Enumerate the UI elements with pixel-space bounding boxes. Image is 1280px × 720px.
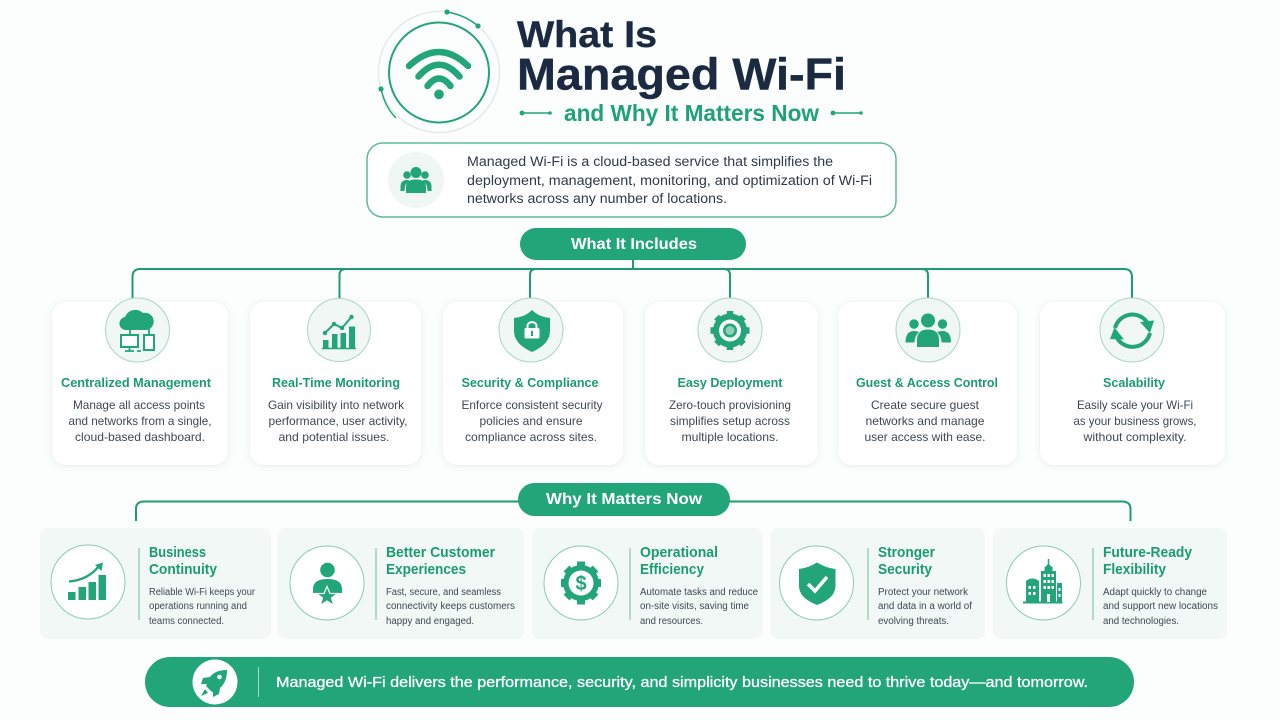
panel: Scalability: without complexity. — [1082, 430, 1186, 444]
icon: people — [400, 167, 432, 193]
callout: closing banner: Managed Wi-Fi delivers the performance, security, and simplicity businesses need to thrive today—and tomorrow. — [276, 674, 1088, 691]
panel: Scalability: as your business grows, — [1074, 414, 1196, 428]
panel: Future-Ready Flexibility — [993, 528, 1227, 639]
panel: Centralized Management: Centralized Management — [61, 375, 212, 390]
panel: definition: deployment, management, monitoring, and optimization of Wi-Fi — [467, 173, 872, 188]
panel: Future-Ready Flexibility: Flexibility — [1103, 561, 1167, 578]
panel: Better Customer Experiences: Fast, secure, and seamless — [386, 587, 501, 598]
panel: Better Customer Experiences — [278, 528, 524, 639]
panel: definition — [367, 143, 896, 217]
panel: Better Customer Experiences: Experiences — [386, 561, 466, 578]
panel: Real-Time Monitoring: and potential issues. — [278, 430, 390, 444]
heading: Why It Matters Now: Why It Matters Now — [546, 491, 703, 508]
heading: What It Includes: What It Includes — [571, 236, 697, 253]
panel: Operational Efficiency: and resources. — [640, 616, 703, 627]
panel: Operational Efficiency: Automate tasks and reduce — [640, 587, 758, 598]
panel: Future-Ready Flexibility: and support new locations — [1103, 601, 1218, 612]
panel: Better Customer Experiences: connectivity keeps customers — [386, 601, 515, 612]
icon: gear with dollar — [561, 562, 601, 604]
panel: Security & Compliance: Enforce consistent security — [462, 398, 602, 412]
panel: Security & Compliance: compliance across sites. — [465, 430, 597, 444]
icon: cloud and devices — [119, 310, 154, 351]
icon: growth bars — [68, 562, 106, 600]
title: Managed Wi-Fi — [517, 50, 846, 100]
panel: Operational Efficiency: on-site visits, saving time — [640, 601, 749, 612]
panel: Easy Deployment: Zero-touch provisioning — [669, 398, 791, 412]
panel: Guest & Access Control: Create secure guest — [871, 398, 980, 412]
panel: Scalability — [1040, 298, 1225, 465]
icon: chart with trend line — [322, 315, 356, 348]
panel: Real-Time Monitoring: performance, user activity, — [268, 414, 408, 428]
panel: Business Continuity: Reliable Wi-Fi keeps your — [149, 587, 256, 598]
connector lines: why it matters now — [136, 502, 1130, 521]
callout: closing banner — [145, 657, 1134, 707]
panel: Future-Ready Flexibility: Adapt quickly to change — [1103, 587, 1207, 598]
panel: Guest & Access Control — [838, 298, 1017, 465]
panel: Easy Deployment: simplifies setup across — [670, 414, 790, 428]
panel: Security & Compliance — [443, 298, 623, 465]
panel: Business Continuity: operations running and — [149, 601, 247, 612]
connector lines: what it includes — [132, 260, 1132, 298]
panel: Better Customer Experiences: Better Customer — [386, 544, 495, 561]
panel: Scalability: Easily scale your Wi-Fi — [1077, 398, 1193, 412]
panel: Easy Deployment: Easy Deployment — [678, 375, 783, 390]
panel: Security & Compliance: Security & Compliance — [462, 375, 598, 390]
heading: What It Includes — [520, 228, 746, 260]
panel: Stronger Security: Stronger — [878, 544, 935, 561]
icon: city buildings — [1023, 559, 1062, 602]
panel: Easy Deployment: multiple locations. — [682, 430, 778, 444]
panel: Business Continuity: teams connected. — [149, 616, 224, 627]
panel: Real-Time Monitoring: Gain visibility into network — [268, 398, 405, 412]
icon: circular arrows — [1110, 315, 1154, 347]
panel: Centralized Management: Manage all access points — [73, 398, 205, 412]
title: What Is — [517, 13, 657, 55]
logo: Wi-Fi emblem — [378, 9, 500, 132]
panel: Real-Time Monitoring — [250, 298, 421, 465]
subtitle with arrows: and Why It Matters Now — [564, 100, 819, 126]
title — [517, 13, 846, 100]
panel: Stronger Security: evolving threats. — [878, 616, 949, 627]
panel: Security & Compliance: policies and ensure — [480, 414, 583, 428]
panel: definition: Managed Wi-Fi is a cloud-based service that simplifies the — [467, 154, 833, 169]
panel: Guest & Access Control: Guest & Access Control — [856, 375, 998, 390]
panel: Stronger Security: Protect your network — [878, 587, 969, 598]
panel: Operational Efficiency — [532, 528, 762, 639]
panel: Better Customer Experiences: happy and engaged. — [386, 616, 474, 627]
panel: Operational Efficiency: Operational — [640, 544, 718, 561]
panel: Real-Time Monitoring: Real-Time Monitoring — [272, 375, 400, 390]
panel: Stronger Security: and data in a world of — [878, 601, 972, 612]
icon: gear with dollar: $ — [575, 573, 587, 595]
icon: person with star — [313, 563, 342, 606]
icon: shield with padlock — [514, 310, 550, 352]
panel: Operational Efficiency: Efficiency — [640, 561, 705, 578]
icon: shield with check — [799, 562, 836, 605]
panel: Business Continuity: Business — [149, 544, 206, 561]
panel: Guest & Access Control: networks and manage — [866, 414, 985, 428]
icon: rocket — [201, 670, 227, 697]
panel: Stronger Security: Security — [878, 561, 933, 578]
icon: gear — [710, 311, 750, 350]
panel: Guest & Access Control: user access with ease. — [864, 430, 986, 444]
panel: Future-Ready Flexibility: Future-Ready — [1103, 544, 1193, 561]
panel: Stronger Security — [770, 528, 985, 639]
panel: Easy Deployment — [645, 298, 818, 465]
panel: Centralized Management — [52, 298, 228, 465]
heading: Why It Matters Now — [518, 483, 730, 516]
panel: Scalability: Scalability — [1103, 375, 1166, 390]
panel: Business Continuity: Continuity — [149, 561, 218, 578]
panel: Future-Ready Flexibility: and technologies. — [1103, 616, 1179, 627]
icon: group of users — [906, 314, 951, 347]
panel: Centralized Management: and networks from a single, — [68, 414, 212, 428]
panel: Centralized Management: cloud-based dashboard. — [75, 430, 205, 444]
panel: Business Continuity — [40, 528, 271, 639]
panel: definition: networks across any number of locations. — [467, 191, 727, 206]
